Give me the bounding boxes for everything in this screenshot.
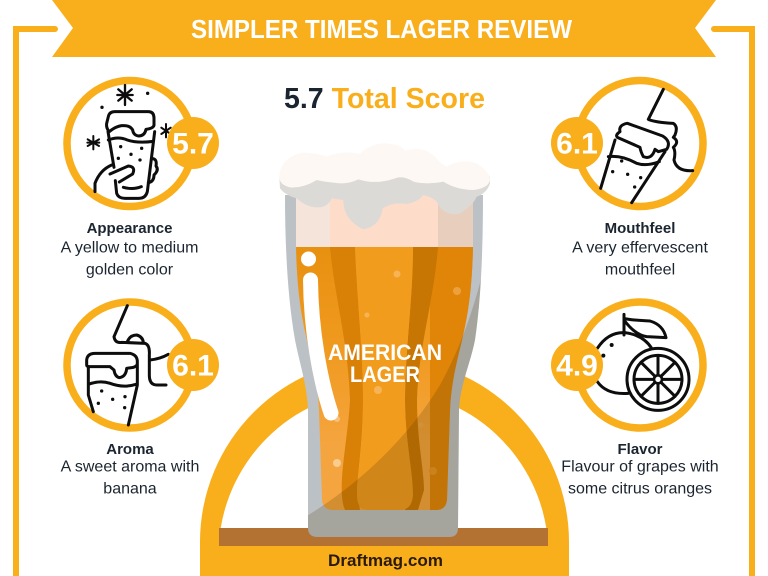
source footer: Draftmag.com xyxy=(328,551,443,570)
score badge xyxy=(551,117,603,169)
flavor text: some citrus oranges xyxy=(568,480,712,498)
aroma text: banana xyxy=(103,480,157,498)
score badge xyxy=(167,339,219,391)
foam xyxy=(279,143,490,229)
icon: glass at lips xyxy=(577,80,703,206)
glass label xyxy=(328,340,442,387)
score badge: 6.1 xyxy=(556,128,598,160)
highlight xyxy=(301,252,331,413)
empty glass tint xyxy=(296,195,473,247)
panel: appearance xyxy=(61,80,219,278)
score badge: 6.1 xyxy=(172,350,214,382)
aroma text xyxy=(61,441,199,498)
title banner: SIMPLER TIMES LAGER REVIEW xyxy=(191,14,572,44)
icon: nose over beer xyxy=(67,302,193,428)
score badge xyxy=(167,117,219,169)
panel: aroma xyxy=(61,302,219,498)
icon: hand holding beer xyxy=(67,80,193,206)
arch base xyxy=(200,358,569,576)
mouthfeel text xyxy=(572,220,708,278)
beer liquid xyxy=(290,247,480,512)
appearance text: Appearance xyxy=(87,220,172,237)
glass body xyxy=(285,195,483,537)
score badge: 5.7 xyxy=(172,128,214,160)
aroma text: Aroma xyxy=(106,441,154,458)
panel: mouthfeel xyxy=(551,80,708,278)
score badge: 4.9 xyxy=(556,350,598,382)
flavor text: Flavour of grapes with xyxy=(561,458,719,476)
mouthfeel text: mouthfeel xyxy=(605,262,675,278)
glass label: AMERICAN xyxy=(328,340,442,365)
score badge xyxy=(551,339,603,391)
total score heading: 5.7 Total Score xyxy=(284,83,485,115)
glass label: LAGER xyxy=(350,362,420,387)
frame: right bracket xyxy=(714,29,752,576)
frame: left bracket xyxy=(16,29,55,576)
title banner xyxy=(52,0,716,57)
mouthfeel text: Mouthfeel xyxy=(605,220,675,237)
shadow overlay xyxy=(308,280,481,537)
mouthfeel text: A very effervescent xyxy=(572,240,708,256)
flavor text: Flavor xyxy=(617,441,663,458)
flavor text xyxy=(561,441,719,498)
icon: orange and slice xyxy=(577,302,703,428)
appearance text xyxy=(61,220,198,278)
panel: flavor xyxy=(551,302,719,498)
beer glass illustration xyxy=(279,143,490,545)
appearance text: golden color xyxy=(86,262,174,278)
aroma text: A sweet aroma with xyxy=(61,458,199,476)
appearance text: A yellow to medium xyxy=(61,240,198,256)
